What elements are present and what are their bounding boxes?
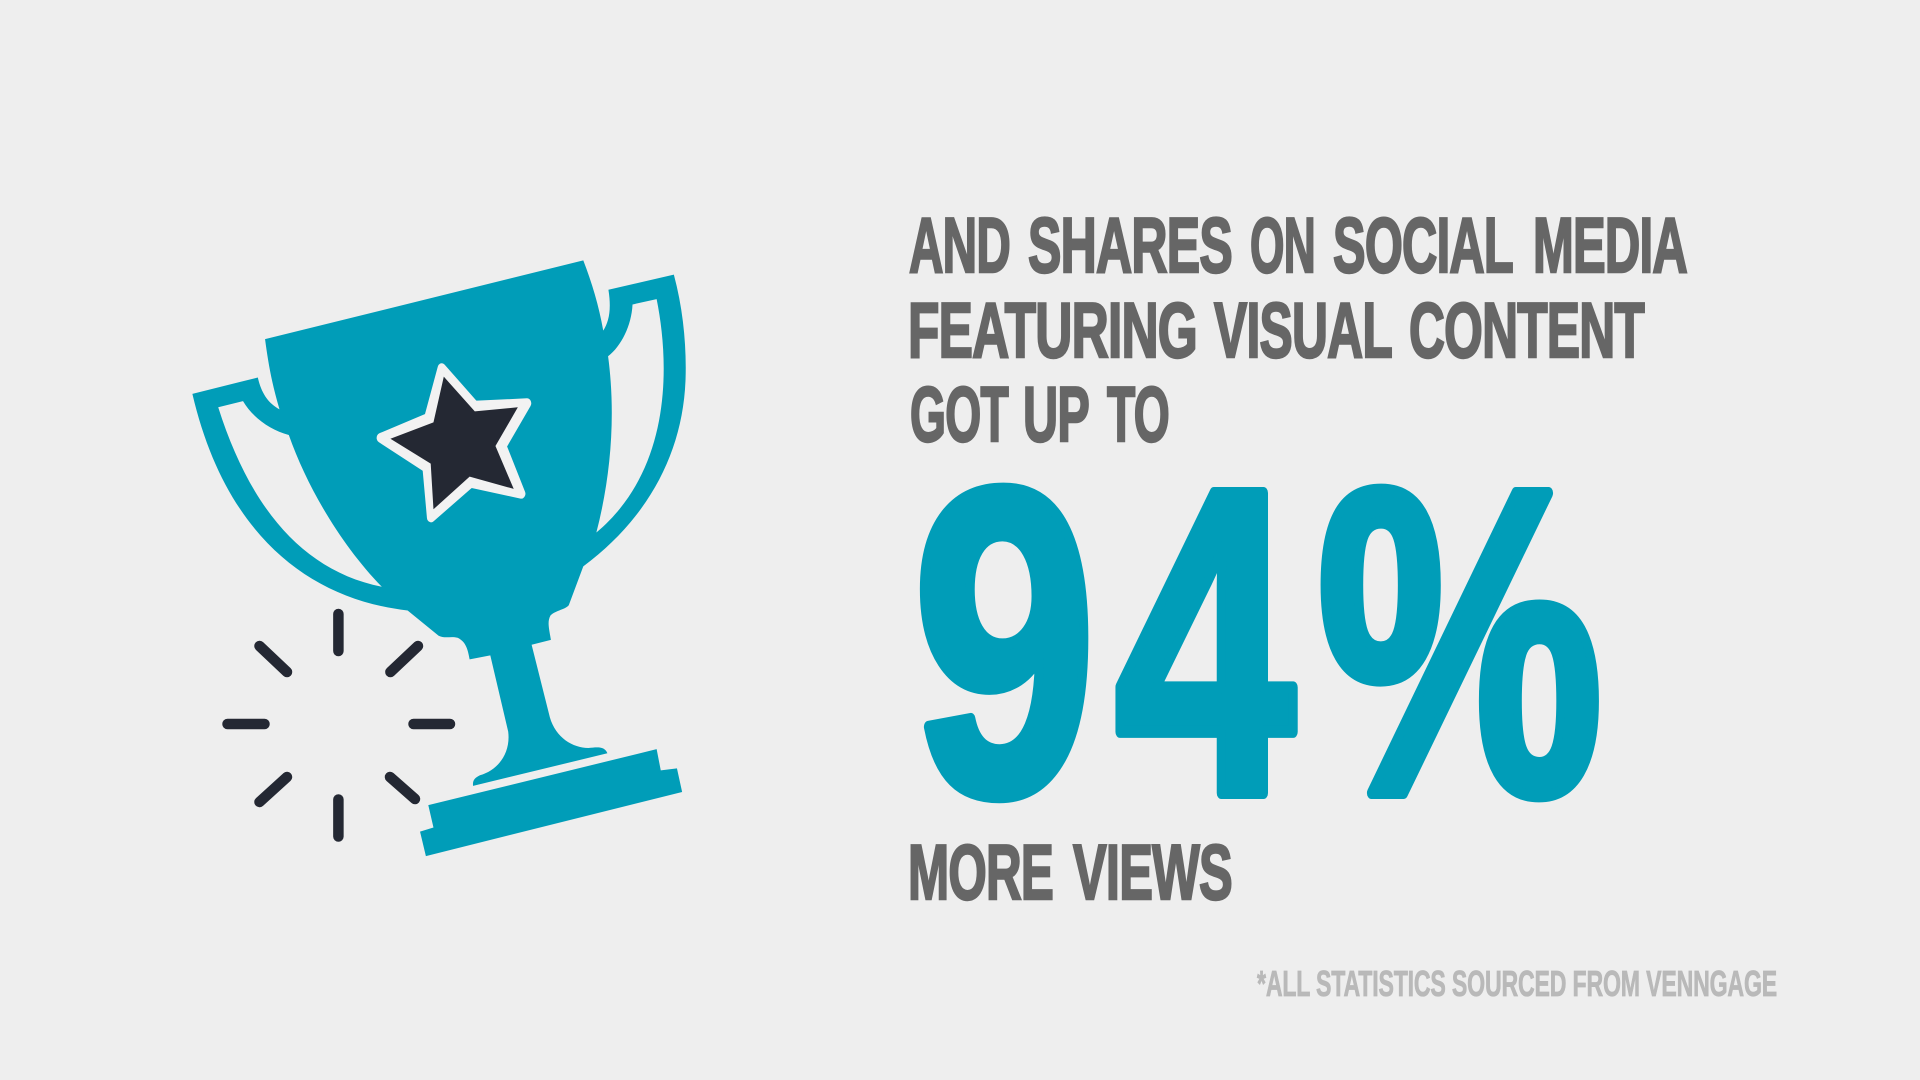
heading line 2: CONTENT	[1409, 286, 1644, 374]
big statistic: 94%: 9	[913, 399, 1096, 886]
big statistic: 94%	[913, 399, 1603, 886]
heading line 3	[910, 370, 1169, 458]
trophy cup, handles and stem	[192, 260, 686, 786]
heading line 1	[909, 201, 1687, 289]
heading line 3: TO	[1107, 370, 1169, 458]
heading line 2: VISUAL	[1214, 286, 1392, 374]
icon: trophy with star	[192, 260, 686, 856]
star outline	[381, 368, 527, 517]
more views label: VIEWS	[1073, 828, 1232, 916]
heading line 3: GOT	[910, 370, 1008, 458]
big statistic: 94%: 4	[1115, 399, 1297, 886]
heading line 1: MEDIA	[1533, 201, 1687, 289]
star	[390, 377, 518, 509]
heading line 3: UP	[1023, 370, 1089, 458]
big statistic: 94%: %	[1317, 399, 1603, 886]
heading line 1: ON	[1250, 201, 1315, 289]
heading line 2	[908, 286, 1644, 374]
heading line 2: FEATURING	[908, 286, 1197, 374]
heading line 1: SHARES	[1028, 201, 1232, 289]
trophy base	[420, 749, 682, 856]
icon: burst ticks	[228, 614, 450, 836]
heading line 1: SOCIAL	[1333, 201, 1513, 289]
heading line 1: AND	[909, 201, 1010, 289]
more views label: MORE	[908, 828, 1053, 916]
